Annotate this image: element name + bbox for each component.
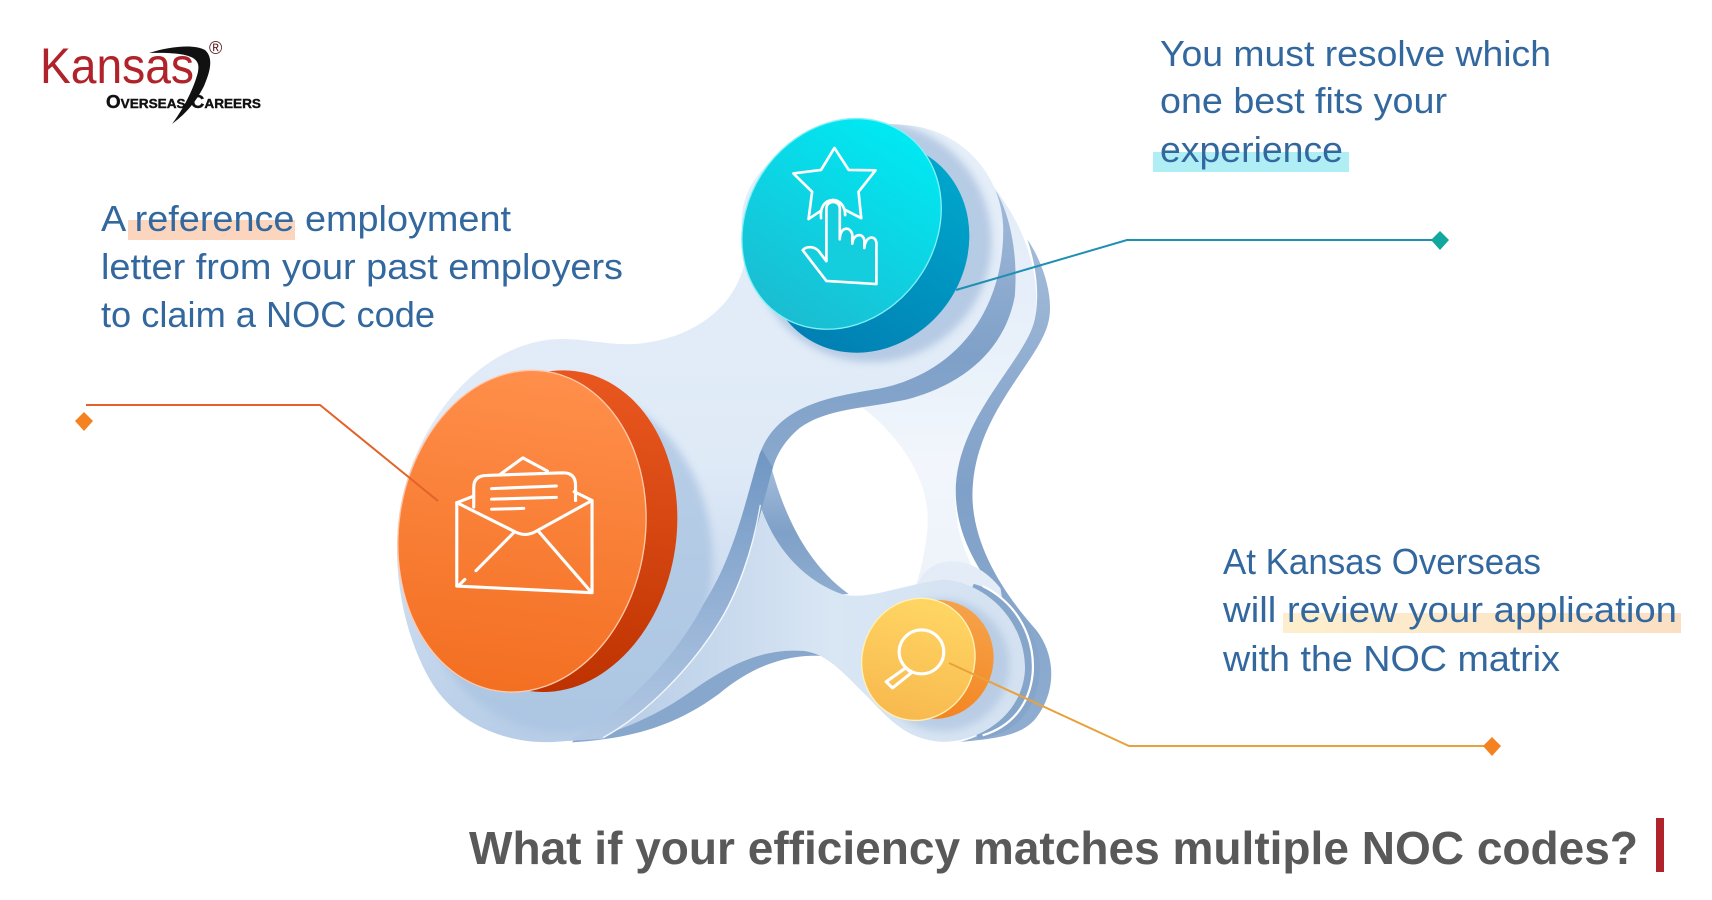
highlight: experience	[1153, 152, 1349, 172]
orange disc	[377, 354, 698, 708]
callout: best fit: one best fits your	[1160, 80, 1447, 121]
yellow disc shadow	[876, 599, 1009, 731]
title: What if your efficiency matches multiple NOC codes?	[469, 822, 1638, 874]
pale plate right of the hole	[858, 184, 1036, 586]
lower arm surface	[594, 503, 1025, 742]
outer right ribbon	[956, 239, 1051, 742]
logo	[40, 38, 261, 124]
cyan disc shadow	[751, 121, 992, 362]
cyan disc	[702, 82, 1009, 391]
callout: best fit: experience	[1160, 129, 1343, 170]
logo tagline: Overseas Careers	[106, 92, 261, 112]
main surface	[397, 124, 1003, 742]
diamond marker: teal	[1431, 231, 1449, 250]
orange disc shadow	[444, 407, 715, 732]
diamond marker: orange	[75, 412, 93, 431]
callout: reference letter	[101, 198, 623, 335]
icon: open envelope with letter	[457, 458, 592, 593]
logo swoosh	[149, 46, 210, 124]
bottom ribbon highlight	[630, 702, 724, 738]
logo wordmark: Kansas	[40, 38, 194, 94]
band along the main surface edge	[559, 450, 773, 741]
orange disc side	[408, 354, 698, 708]
callout: reference letter: letter from your past employers	[101, 246, 623, 287]
soft halos under discs	[413, 121, 992, 733]
callout: Kansas Overseas review: with the NOC matrix	[1222, 638, 1560, 679]
icon: star and pointing hand	[793, 148, 876, 284]
highlight: review your application	[1283, 613, 1681, 633]
diamond marker: amber	[1483, 737, 1501, 756]
callout: best fit	[1153, 33, 1551, 172]
callout: reference letter: to claim a NOC code	[101, 294, 435, 335]
ribbon highlight line	[603, 505, 760, 738]
text: reference letter: A reference employment	[101, 198, 511, 239]
text: best fit: You must resolve which	[1160, 33, 1551, 74]
highlight: reference	[128, 220, 295, 240]
yellow disc face	[848, 586, 989, 733]
icon: magnifying glass	[886, 630, 944, 688]
cyan disc face	[702, 82, 981, 366]
title accent bar	[1656, 818, 1664, 872]
bottom dark ribbon	[572, 617, 826, 742]
leader line: amber	[949, 663, 1501, 756]
cyan disc side	[726, 104, 1009, 391]
text: Kansas Overseas review: At Kansas Overseas	[1223, 541, 1541, 582]
callout: Kansas Overseas review: will review your application	[1222, 589, 1677, 630]
small lobe white separator	[983, 586, 1033, 735]
lower ribbon around the hole	[759, 470, 849, 595]
small lobe upper halo	[916, 561, 1005, 617]
diagram: three-lobed 3D shape	[377, 82, 1051, 742]
yellow disc side	[865, 587, 1007, 732]
upper ribbon around the hole	[692, 184, 1016, 529]
orange disc face	[377, 354, 667, 708]
leader line: teal	[956, 231, 1449, 290]
callout: Kansas Overseas review	[1222, 541, 1681, 679]
logo registered mark: ®	[209, 38, 222, 58]
yellow disc	[848, 586, 1007, 733]
small lobe right ribbons	[942, 584, 1040, 739]
leader line: orange	[75, 405, 438, 501]
